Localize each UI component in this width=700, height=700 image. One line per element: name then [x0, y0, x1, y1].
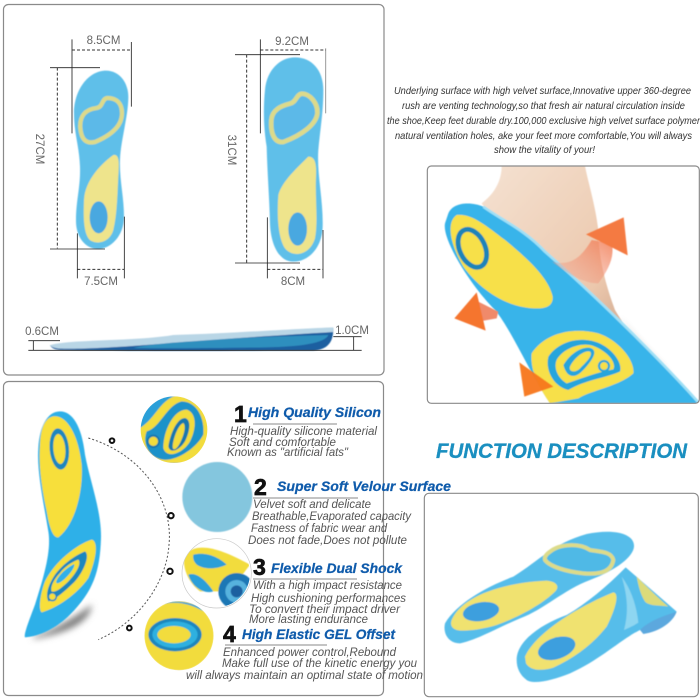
- insole: side profile: [28, 327, 362, 351]
- feature 2: super soft velour surface: Does not fade,Does not pollute: [248, 533, 407, 547]
- label: 7.5CM heel width: 7.5CM: [84, 276, 118, 288]
- insole: curved side view: [25, 395, 255, 672]
- feature 3: flexible dual shock: Flexible Dual Shock: [271, 560, 403, 576]
- dashed arc with markers: [88, 438, 174, 640]
- feature 1: high quality silicon: High-quality silicone material: [230, 424, 377, 438]
- label: 27CM length: 27CM: [33, 134, 45, 164]
- feature 2: super soft velour surface: Super Soft Velour Surface: [277, 478, 451, 494]
- text block: product description: show the vitality of your!: [494, 144, 595, 156]
- label: 8CM heel width: 8CM: [281, 276, 305, 288]
- foot: [482, 166, 622, 322]
- label: 1.0CM thickness: 1.0CM: [335, 325, 369, 337]
- insole sole: [445, 203, 699, 403]
- arrow: bottom: [519, 362, 553, 397]
- feature 4: high elastic gel offset: Make full use of the kinetic energy you: [222, 656, 417, 670]
- feature 1: high quality silicon: Soft and comfortable: [229, 435, 336, 449]
- feature 2: super soft velour surface: Breathable,Evaporated capacity: [252, 509, 412, 523]
- panel: insole dimensions: [4, 4, 384, 375]
- feature 4: high elastic gel offset: High Elastic GEL Offset: [242, 626, 396, 642]
- feature 1: high quality silicon: Known as "artificial fats": [227, 445, 349, 459]
- feature 2: super soft velour surface: [248, 474, 451, 547]
- feature 4: high elastic gel offset: Enhanced power control,Rebound: [223, 645, 396, 659]
- label: 8.5CM width: 8.5CM: [87, 35, 120, 47]
- feature 3: flexible dual shock: [249, 554, 406, 626]
- feature 3: flexible dual shock: 3: [253, 554, 266, 580]
- feature 1: high quality silicon: 1: [234, 401, 247, 427]
- feature 2: super soft velour surface: Fastness of fabric wear and: [251, 521, 387, 535]
- feature 2: super soft velour surface: Velvet soft and delicate: [253, 497, 371, 511]
- feature 3: flexible dual shock: To convert their impact driver: [249, 602, 401, 616]
- circle 3: rolled insole: [182, 539, 255, 610]
- arrow: upper right: [552, 217, 628, 283]
- feature 1: high quality silicon: High Quality Silicon: [248, 404, 381, 420]
- panel: four features: [4, 382, 384, 696]
- feature 3: flexible dual shock: High cushioning performances: [251, 591, 406, 605]
- feature 4: high elastic gel offset: 4: [223, 621, 236, 647]
- front insole: [640, 612, 677, 634]
- feature 2: super soft velour surface: 2: [254, 474, 267, 500]
- feature 3: flexible dual shock: More lasting endurance: [249, 612, 368, 626]
- text block: product description: [387, 85, 700, 156]
- insole: 31cm size: [235, 39, 326, 278]
- heading: function description: FUNCTION DESCRIPTION: [436, 440, 688, 463]
- back insole: [444, 532, 634, 643]
- feature 3: flexible dual shock: With a high impact resistance: [253, 578, 402, 592]
- insole: 27cm size: [50, 39, 131, 278]
- circle 1: silicon detail: [140, 395, 210, 465]
- heel gel: [451, 215, 553, 308]
- label: 9.2CM width: 9.2CM: [275, 36, 309, 48]
- label: 31CM length: 31CM: [225, 135, 237, 165]
- circle 4: gel offset: [144, 601, 214, 672]
- panel: foot on insole photo: [427, 166, 699, 403]
- forefoot gel: [531, 331, 633, 403]
- panel: two insoles photo: [424, 493, 698, 697]
- feature 4: high elastic gel offset: will always maintain an optimal state of motion: [186, 668, 423, 682]
- label: 0.6CM thickness: 0.6CM: [25, 326, 59, 338]
- feature 4: high elastic gel offset: [186, 621, 423, 682]
- arrow: left: [454, 292, 498, 331]
- circle 2: velour surface: [182, 462, 252, 532]
- feature 1: high quality silicon: [227, 401, 381, 459]
